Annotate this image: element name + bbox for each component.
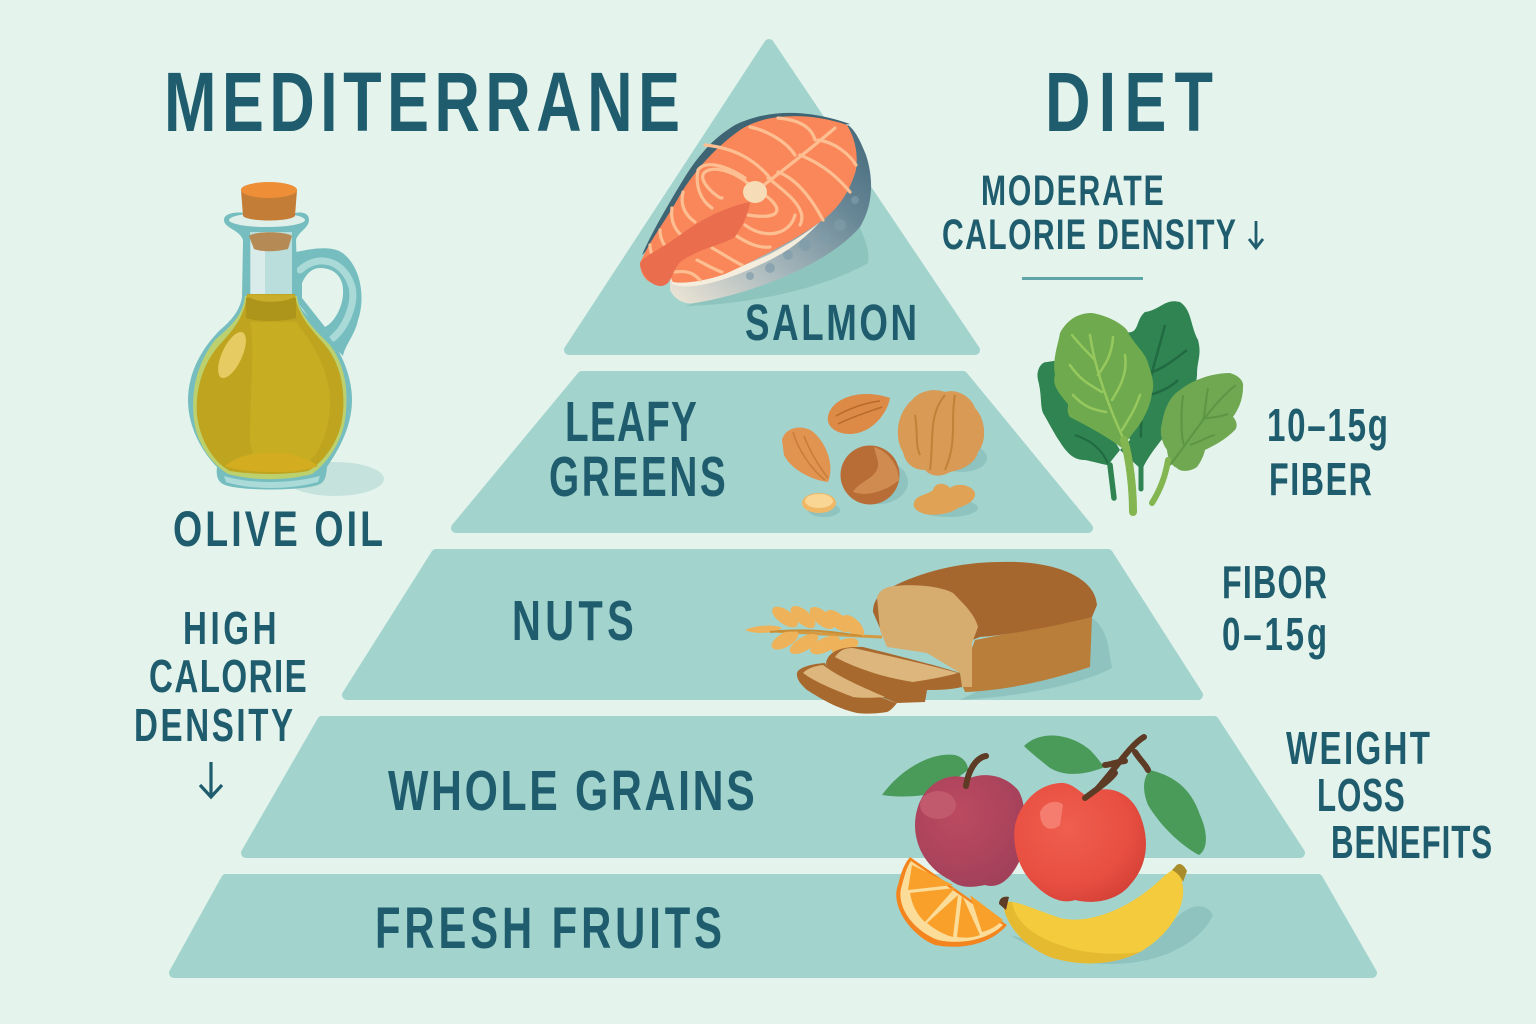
label: leafy greens — [549, 391, 726, 509]
shadow — [685, 228, 868, 306]
label: high calorie density — [134, 604, 307, 797]
plum apple — [915, 775, 1025, 887]
dark back edge — [642, 113, 850, 255]
red apple — [1014, 783, 1146, 902]
shadow — [286, 462, 384, 496]
title: DIET — [1045, 55, 1213, 149]
flesh — [640, 116, 857, 283]
orange slice — [896, 857, 1007, 947]
glass neck light — [250, 232, 292, 300]
back slice — [826, 647, 962, 703]
skin — [670, 125, 871, 303]
label: fibor 0-15g — [1222, 557, 1327, 660]
pyramid tier 5: fresh fruits — [174, 879, 1372, 973]
label: weight loss benefits: LOSS — [1317, 770, 1405, 822]
belly flap — [640, 202, 750, 286]
right leaf — [1161, 373, 1243, 471]
cork top — [241, 182, 297, 220]
shadow — [960, 618, 1112, 700]
label: moderate calorie density: MODERATE — [981, 166, 1164, 214]
loaf crust — [873, 562, 1097, 645]
twig — [1090, 737, 1148, 797]
cork plug — [249, 232, 292, 251]
loaf side — [960, 617, 1092, 692]
right leaf stem — [1152, 460, 1168, 503]
label: fibor 0-15g: 0–15g — [1222, 610, 1327, 660]
base highlight — [224, 476, 320, 488]
flesh bands — [650, 118, 856, 280]
label: moderate calorie density — [942, 166, 1263, 258]
label: fresh fruits: FRESH FRUITS — [375, 895, 722, 961]
wheat stalk — [745, 602, 882, 658]
shadows — [937, 444, 987, 472]
label: leafy greens: LEAFY — [565, 391, 697, 454]
walnut piece — [914, 484, 975, 515]
pyramid tier 4: whole grains — [246, 721, 1300, 853]
pyramid tier 2: leafy greens — [456, 376, 1088, 528]
label: 10-15g fiber: 10–15g — [1267, 401, 1388, 451]
icon: spinach leaves — [1037, 301, 1243, 512]
apple stem left — [966, 756, 986, 786]
label: weight loss benefits — [1286, 724, 1492, 869]
almond left — [782, 428, 830, 482]
handle — [296, 248, 362, 356]
back leaf right — [1110, 301, 1200, 470]
title: MEDITERRANE — [164, 55, 680, 149]
banana — [1003, 865, 1185, 963]
label: high calorie density: CALORIE — [149, 652, 307, 702]
front leaf stem — [1124, 440, 1133, 512]
pale skin edge — [670, 222, 820, 287]
label: salmon: SALMON — [745, 295, 917, 351]
label: moderate calorie density: CALORIE DENSITY — [942, 210, 1236, 258]
front leaf — [1054, 313, 1153, 448]
title — [164, 55, 1213, 149]
hazelnut — [840, 446, 900, 504]
icon: arrow down — [1249, 221, 1263, 248]
front leaf veins — [1070, 335, 1140, 440]
skin mottling — [746, 196, 859, 280]
loaf face — [877, 585, 978, 687]
shadow — [1010, 906, 1213, 964]
small nut — [802, 493, 836, 513]
pyramid tier 3: nuts — [347, 554, 1198, 695]
left leaf — [882, 755, 968, 796]
icon: bread — [745, 562, 1112, 714]
label: olive oil: OLIVE OIL — [173, 502, 383, 557]
backbone — [743, 181, 767, 203]
almond top — [828, 394, 890, 434]
label: nuts: NUTS — [512, 589, 634, 653]
back leaf left — [1037, 360, 1120, 465]
icon: fruits — [882, 735, 1213, 964]
walnut — [898, 390, 984, 476]
label: weight loss benefits: BENEFITS — [1331, 817, 1492, 869]
glass rim — [229, 213, 305, 227]
oil highlight — [212, 328, 252, 382]
icon: nuts — [782, 390, 987, 517]
label: fibor 0-15g: FIBOR — [1222, 557, 1327, 608]
label: 10-15g fiber — [1267, 401, 1388, 505]
label: weight loss benefits: WEIGHT — [1286, 724, 1430, 774]
pyramid — [174, 44, 1372, 973]
front slice — [797, 663, 897, 714]
oil outer rim — [193, 296, 346, 479]
label: high calorie density: HIGH — [183, 604, 277, 654]
top leaf — [1024, 735, 1105, 774]
icon: arrow down — [200, 762, 222, 797]
oil — [197, 294, 343, 474]
icon: olive oil bottle — [188, 182, 384, 496]
icon: salmon steak — [640, 113, 871, 306]
right leaf — [1144, 770, 1206, 855]
label: leafy greens: GREENS — [549, 446, 726, 509]
label: high calorie density: DENSITY — [134, 701, 293, 751]
glass — [188, 213, 352, 489]
pyramid tier 1: salmon — [569, 44, 975, 350]
label: 10-15g fiber: FIBER — [1269, 454, 1372, 505]
label: whole grains: WHOLE GRAINS — [388, 758, 755, 822]
